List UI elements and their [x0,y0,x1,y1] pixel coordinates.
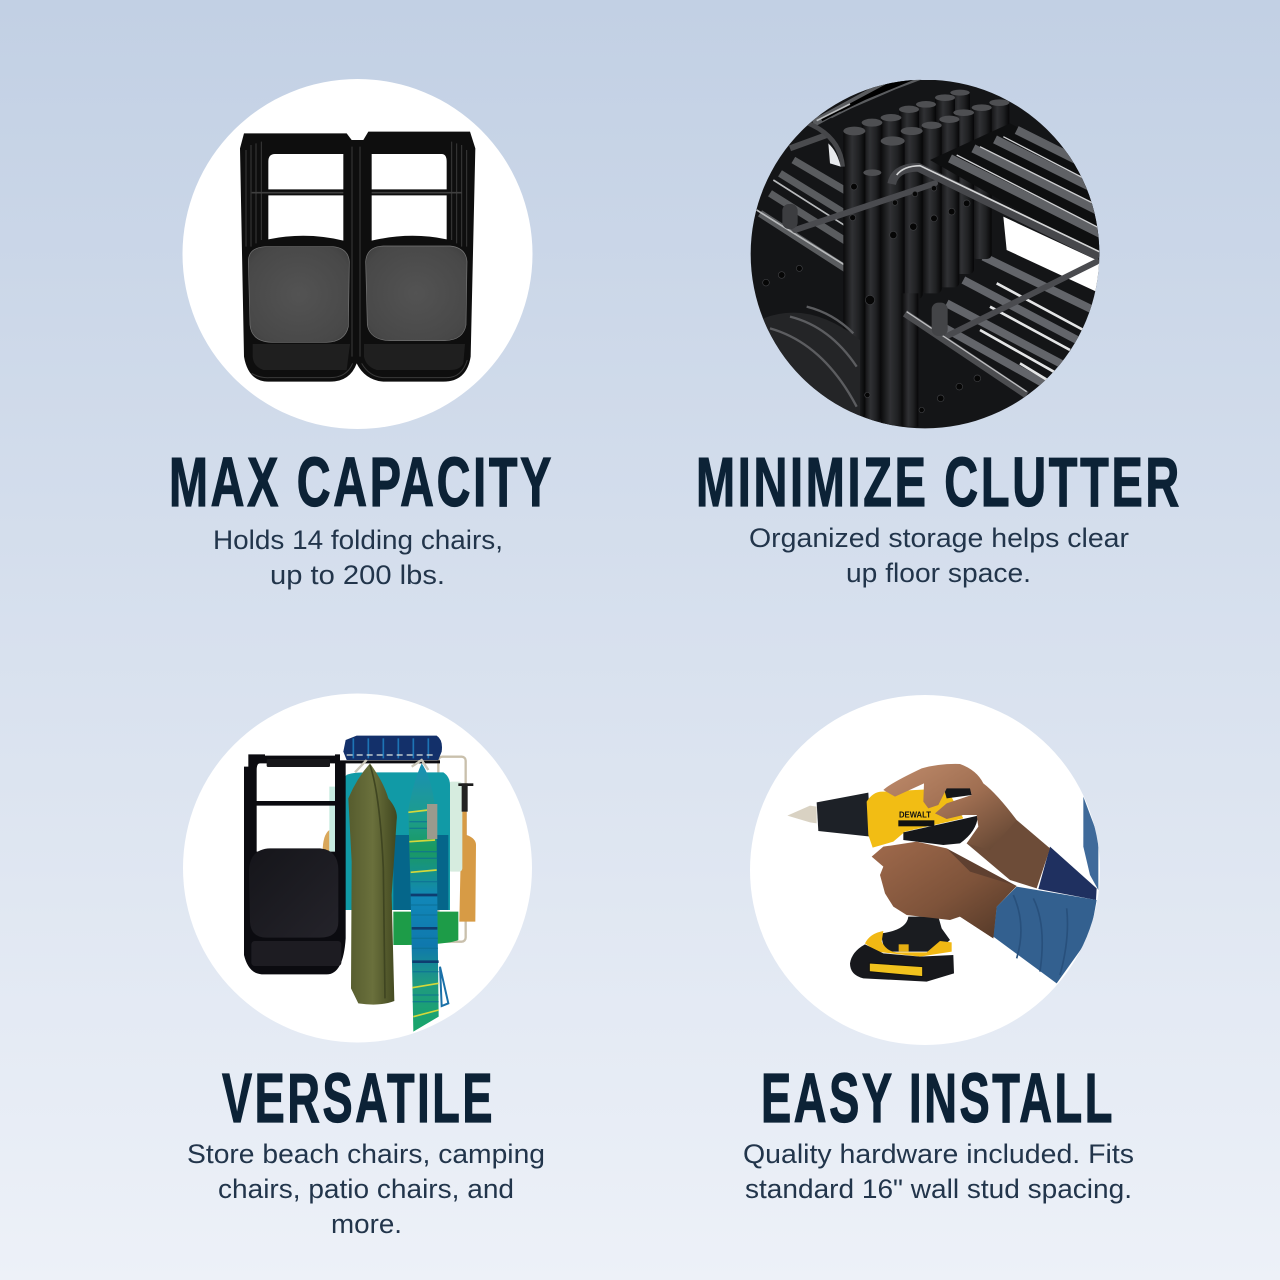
description [743,1139,1134,1204]
description [749,523,1129,588]
description: standard 16" wall stud spacing. [745,1174,1132,1204]
description: up to 200 lbs. [270,560,445,590]
description [187,1139,545,1239]
panel: easy install [743,695,1134,1204]
circle image: hands using a yellow drill: DEWALT [899,810,932,820]
description: Store beach chairs, camping [187,1139,545,1169]
circle image: hands using a yellow drill [750,695,1100,1045]
circle image: rack with chair and camping gear [183,694,532,1042]
heading: VERSATILE [222,1059,495,1137]
description: up floor space. [846,558,1031,588]
circle image: two folded chair stacks [182,79,532,429]
description: Organized storage helps clear [749,523,1129,553]
panel: max capacity [169,79,554,590]
panel: minimize clutter [696,70,1182,588]
heading: MAX CAPACITY [169,443,554,521]
panel: versatile [183,694,545,1239]
description: Holds 14 folding chairs, [213,525,503,555]
circle image: close-up of chair frames [750,70,1100,430]
description: more. [331,1209,402,1239]
description: Quality hardware included. Fits [743,1139,1134,1169]
description [213,525,503,590]
description: chairs, patio chairs, and [218,1174,514,1204]
